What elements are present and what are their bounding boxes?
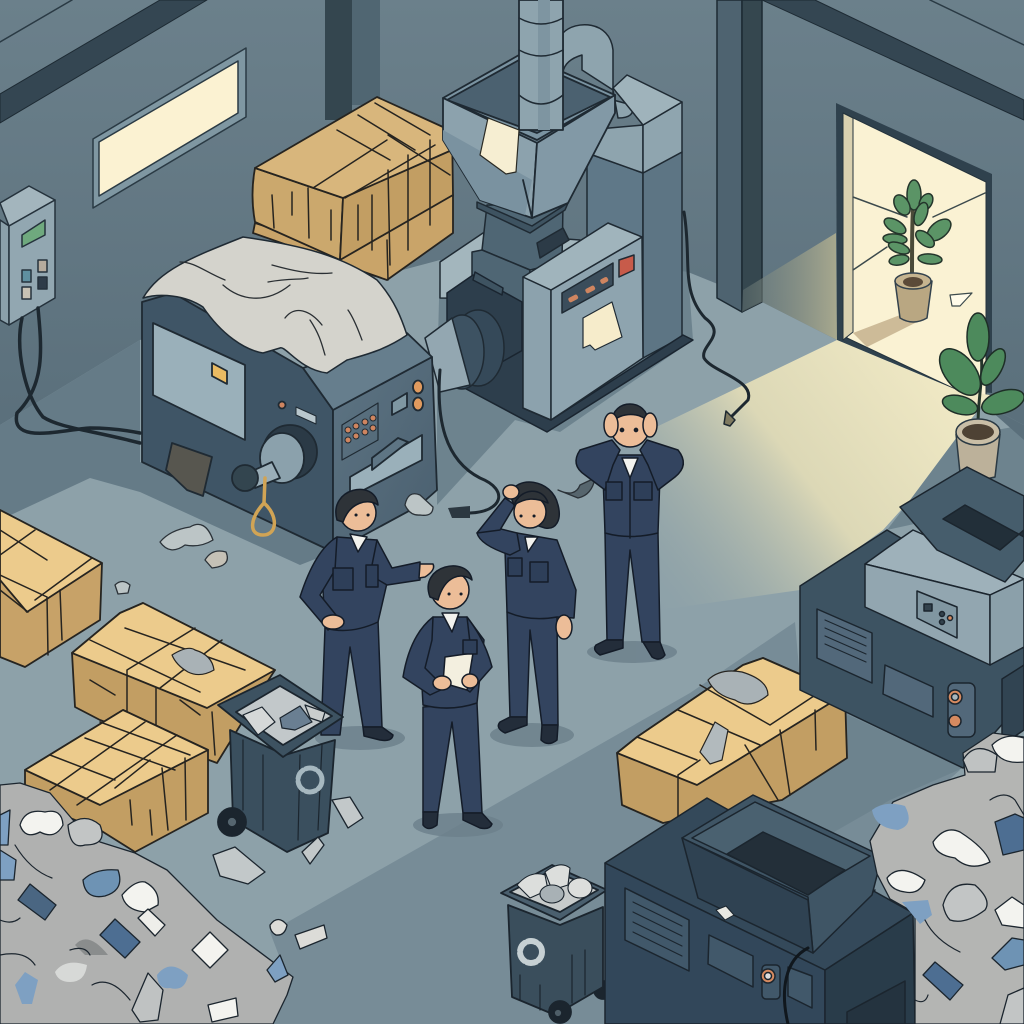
note on hopper bbox=[480, 118, 519, 174]
power cord bbox=[684, 212, 749, 418]
wall base right bbox=[957, 390, 1024, 440]
exhaust pipe bbox=[519, 0, 563, 130]
waste pile left bbox=[0, 783, 293, 1024]
wall line bbox=[0, 0, 72, 42]
light on wall bbox=[742, 233, 837, 340]
exhaust elbow bbox=[563, 25, 633, 118]
cloth cover bbox=[143, 237, 407, 373]
rope noose bbox=[253, 478, 274, 535]
plug on floor bbox=[448, 506, 470, 518]
waste bin front bbox=[501, 865, 612, 1023]
floor shadow lower right bbox=[240, 622, 960, 1024]
waste pile right bbox=[870, 733, 1024, 1024]
back wall bbox=[0, 0, 1024, 440]
main machine bbox=[142, 293, 437, 552]
column left bbox=[325, 0, 380, 120]
worker: front, holding paper bbox=[403, 566, 492, 828]
machine front bbox=[605, 795, 915, 1024]
plug bbox=[724, 411, 735, 426]
plant in doorway bbox=[882, 180, 955, 322]
hay bale stack bbox=[252, 97, 453, 280]
light beam on floor bbox=[630, 340, 990, 610]
control cabinet bbox=[523, 223, 643, 420]
worker shadows bbox=[315, 641, 677, 837]
connecting pipe bbox=[425, 310, 504, 392]
bale lower left bbox=[25, 710, 208, 852]
worker: woman with hand on head bbox=[477, 482, 576, 744]
machine right bbox=[800, 467, 1024, 768]
wall line right bbox=[930, 0, 1024, 45]
worker: back right, hands on head bbox=[576, 404, 683, 659]
loose scraps on floor bbox=[213, 797, 363, 949]
cloth folds bbox=[180, 262, 362, 355]
bale left top bbox=[0, 510, 102, 667]
plant right bbox=[932, 313, 1024, 479]
extruder block bbox=[447, 272, 693, 432]
floor shadow centre bbox=[437, 260, 693, 505]
neck under hopper bbox=[472, 202, 569, 305]
wall control box bbox=[0, 186, 55, 325]
floor shadow left bbox=[0, 340, 333, 565]
bale right bbox=[617, 658, 847, 823]
window bbox=[93, 48, 246, 208]
cord on floor bbox=[439, 370, 499, 513]
floor shadow by pile bbox=[760, 715, 963, 840]
worker: left, pointing bbox=[300, 489, 434, 740]
low base box bbox=[440, 233, 580, 300]
bale middle bbox=[72, 603, 275, 763]
waste bin centre bbox=[218, 675, 343, 852]
doorway bbox=[836, 103, 992, 410]
wall cables bbox=[16, 308, 140, 443]
column right bbox=[717, 0, 762, 312]
wall beam top right bbox=[762, 0, 1024, 120]
hopper bbox=[443, 55, 615, 218]
floor scraps upper bbox=[115, 478, 595, 594]
floor shadow right corner bbox=[887, 425, 1024, 530]
factory floor bbox=[0, 260, 1024, 1024]
wall beam top left bbox=[0, 0, 207, 123]
back cabinet bbox=[587, 75, 682, 358]
